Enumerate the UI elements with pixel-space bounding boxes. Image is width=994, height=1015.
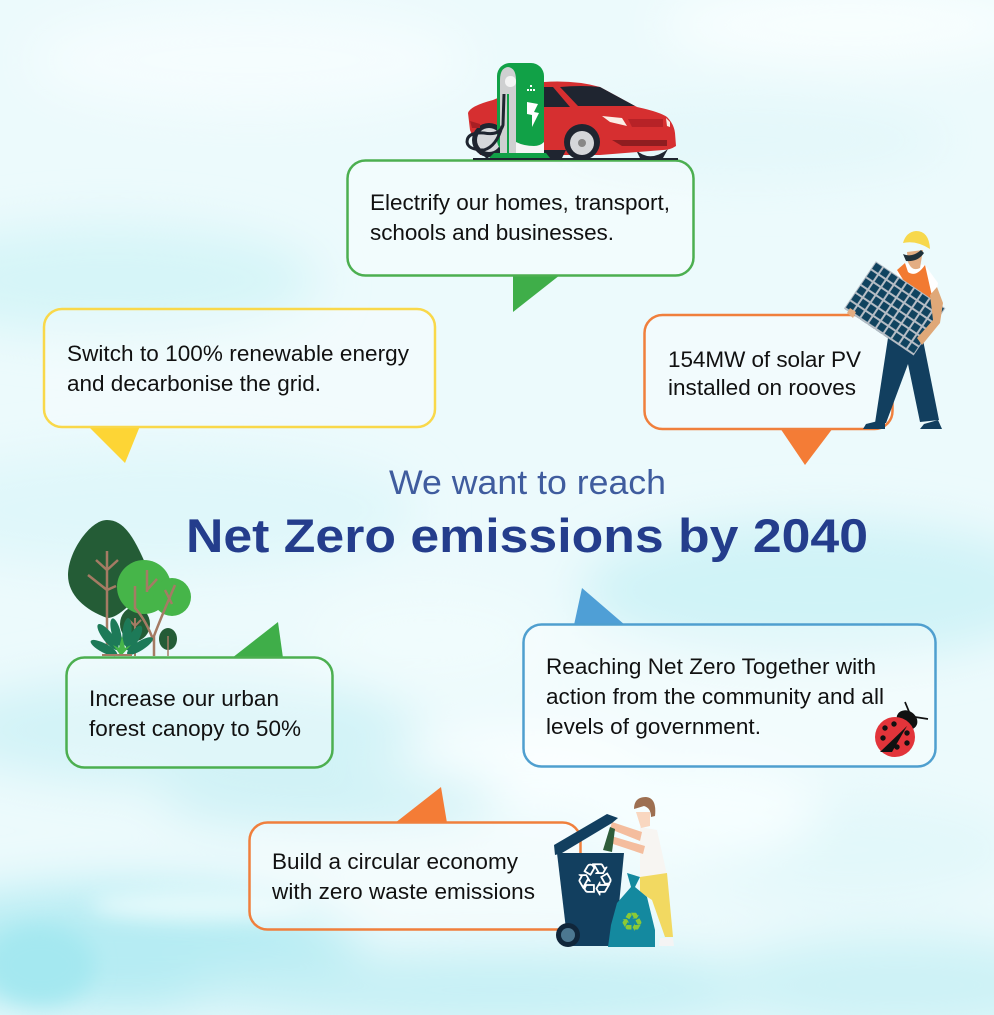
panel: electrify: schools and businesses. [370, 220, 614, 245]
panel: circular economy [250, 787, 580, 930]
panel: electrify: Electrify our homes, transport, [370, 190, 670, 215]
title: We want to reach [389, 464, 666, 502]
panel: solar PV: installed on rooves [668, 375, 856, 400]
panel: reaching net zero together [524, 588, 936, 766]
icon: person and recycling bin: ♲ [575, 855, 615, 906]
panel: reaching net zero together: action from the community and all [546, 684, 884, 709]
icon: person and recycling bin [554, 797, 674, 947]
icon: trees [68, 520, 191, 659]
title [186, 464, 868, 562]
panel: urban forest: forest canopy to 50% [89, 716, 301, 741]
icon: electric car and charger [467, 63, 678, 160]
panel: circular economy: with zero waste emissions [271, 879, 535, 904]
panel: urban forest: Increase our urban [89, 686, 279, 711]
panel: circular economy: Build a circular economy [272, 849, 519, 874]
panel: renewable energy: and decarbonise the grid. [67, 371, 321, 396]
icon: ladybird [875, 702, 928, 757]
title: Net Zero emissions by 2040 [186, 509, 868, 562]
panel: reaching net zero together: Reaching Net Zero Together with [546, 654, 876, 679]
panel: reaching net zero together: levels of government. [546, 714, 761, 739]
panel: electrify [348, 160, 694, 312]
icon: person and recycling bin: ♻ [620, 908, 644, 938]
panel: renewable energy: Switch to 100% renewable energy [67, 341, 410, 366]
panel: urban forest [66, 622, 332, 768]
panel: solar PV [644, 315, 892, 465]
icon: worker with solar panel [844, 231, 945, 429]
panel: renewable energy [44, 309, 435, 463]
panel: solar PV: 154MW of solar PV [668, 347, 861, 372]
